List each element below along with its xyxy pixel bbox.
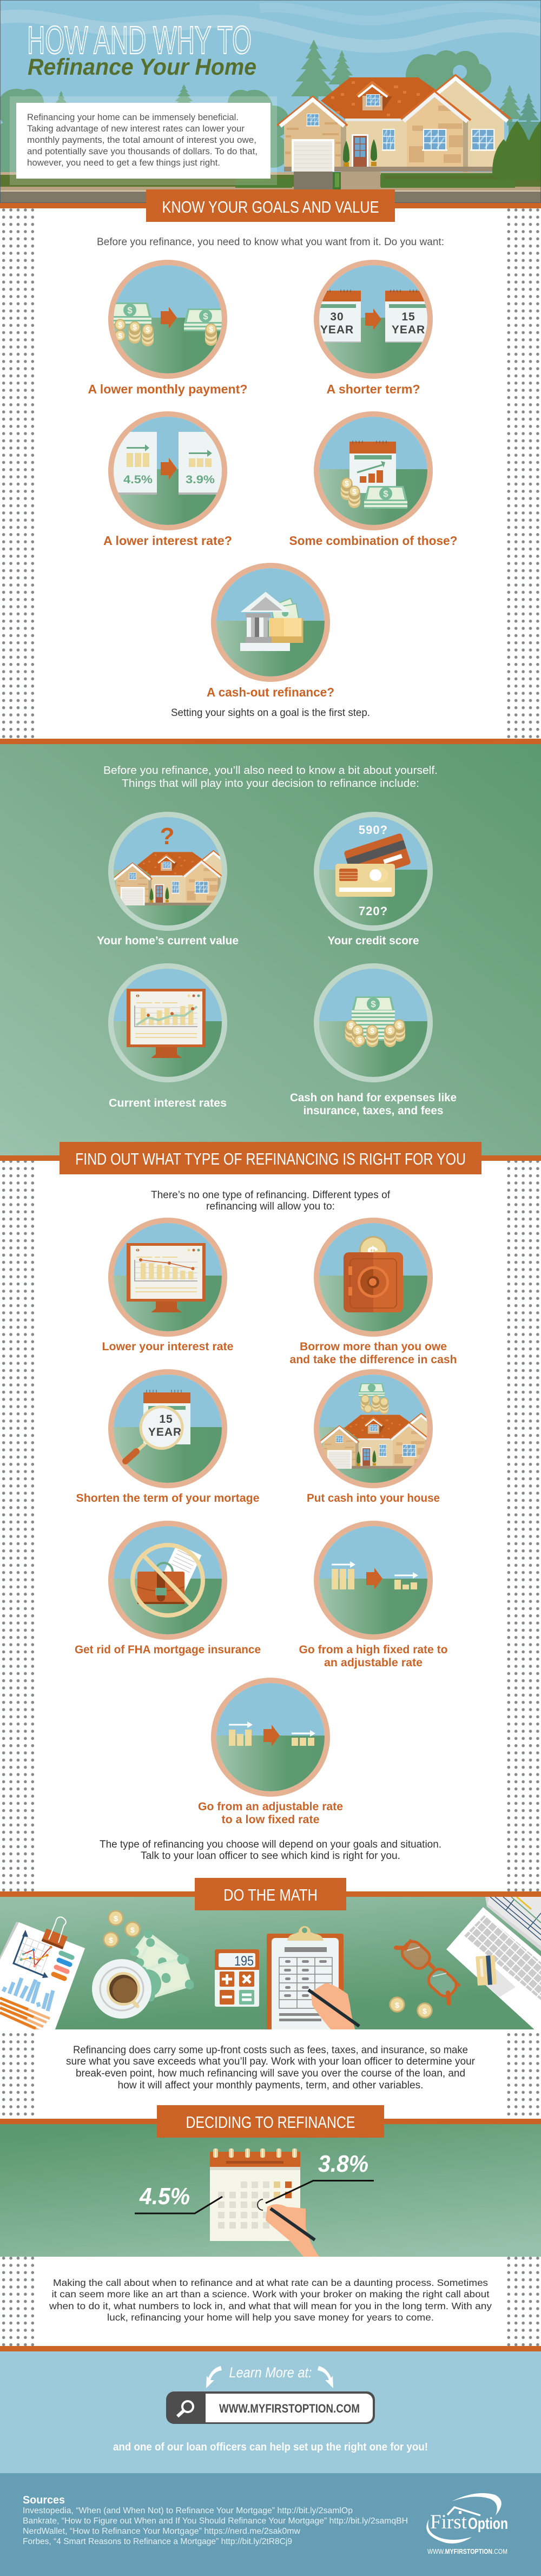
icon: lower interest rate: 3.9% [186, 474, 215, 486]
section intro: refinancing will allow you to: [206, 1201, 335, 1212]
label: Put cash into your house [307, 1492, 440, 1504]
intro text box: however, you need to get a few things just right. [27, 158, 220, 168]
label: Get rid of FHA mortgage insurance [75, 1644, 261, 1656]
label: Your credit score [328, 935, 419, 947]
icon: cash on hand: $ [371, 999, 376, 1009]
coffee cup and saucer [92, 1959, 151, 2019]
closing text: Talk to your loan officer to see which kind is right for you. [141, 1850, 400, 1862]
panel: deciding text [0, 2257, 541, 2346]
icon: shorter term: YEAR [320, 324, 354, 336]
logo [426, 2493, 508, 2555]
icon: credit score [316, 814, 430, 928]
sources list: Forbes, “4 Smart Reasons to Refinance a Mortgage” http://bit.ly/2tR8Cj9 [23, 2537, 292, 2546]
coins top: $ [130, 1926, 135, 1934]
label: Some combination of those? [289, 534, 458, 548]
logo: First [430, 2511, 467, 2533]
icon: lower monthly payment: $ [209, 325, 213, 333]
icon: cash on hand [316, 966, 430, 1080]
icon: lower monthly payment: $ [118, 331, 122, 340]
heading banner [157, 2105, 384, 2138]
label [299, 1644, 448, 1669]
icon: cash on hand: $ [355, 1026, 360, 1035]
section intro: Before you refinance, you need to know what you want from it. Do you want: [97, 236, 444, 248]
intro text box [16, 103, 270, 179]
background trees [0, 40, 541, 178]
calculator: 195 [234, 1954, 254, 1969]
label [198, 1800, 343, 1826]
panel: math text: Refinancing does carry some up-front costs such as fees, taxes, and insurance, so make [73, 2045, 468, 2056]
panel: learn more [0, 2346, 541, 2473]
icon: cash into house [316, 1372, 453, 1486]
label: A lower interest rate? [103, 534, 232, 548]
heading banner [60, 1142, 481, 1174]
label: Cash on hand for expenses like [290, 1092, 457, 1104]
icon: shorter term: YEAR [392, 324, 425, 336]
calendar [210, 2148, 300, 2241]
panel: know your goals [0, 189, 541, 739]
label: and take the difference in cash [290, 1353, 457, 1366]
label: Go from a high fixed rate to [299, 1644, 448, 1656]
panel: type of refinancing [0, 1142, 541, 1891]
panel: do the math [0, 1878, 541, 2036]
coins bottom: $ [423, 2007, 427, 2015]
icon: cash on hand: $ [358, 1036, 362, 1044]
intro text box: Refinancing your home can be immensely beneficial. [27, 113, 239, 122]
coins top [103, 1910, 141, 1948]
sources list: Investopedia, “When (and When Not) to Refinance Your Mortgage” http://bit.ly/2samlOp [23, 2506, 353, 2515]
heading banner: DO THE MATH [223, 1885, 318, 1904]
laptop [446, 1897, 541, 2035]
coins top: $ [114, 1914, 118, 1923]
section intro: Things that will play into your decision to refinance include: [122, 777, 419, 790]
title frame [10, 96, 277, 185]
panel: deciding text: when to do it, what numbers to lock in, and what that will mean for you in the long term. With any [49, 2301, 492, 2311]
coins bottom: $ [395, 2001, 399, 2009]
icon: some combination: $ [352, 487, 357, 496]
icon: home value: ? [160, 823, 174, 850]
callout line: 3.8% [266, 2181, 374, 2203]
call to action: and one of our loan officers can help set up the right one for you! [113, 2441, 428, 2453]
sources list: Bankrate, “How to Figure out When and If You Should Refinance Your Mortgage” http://bit.ly/2samqBH [23, 2516, 408, 2526]
intro text box: Taking advantage of new interest rates can lower your [27, 124, 245, 134]
section intro [103, 764, 438, 790]
heading banner [146, 189, 395, 222]
icon: safe and coin [316, 1220, 430, 1334]
icon: lower monthly payment: $ [203, 311, 208, 321]
callout line: 4.5% [135, 2197, 222, 2213]
label: Lower your interest rate [102, 1340, 234, 1353]
ground and road [0, 172, 541, 203]
panel: deciding text: it can seem more like an art than a science. Work with your broker on making the right call about [52, 2289, 490, 2299]
label: A lower monthly payment? [88, 382, 248, 396]
label: Borrow more than you owe [300, 1340, 447, 1353]
icon: cash on hand: $ [349, 1021, 353, 1030]
section intro: Before you refinance, you’ll also need to know a bit about yourself. [103, 764, 438, 777]
hand with pen [258, 2199, 319, 2257]
label: A shorter term? [327, 382, 420, 396]
panel: deciding text: luck, refinancing your home will help you save money for years to come. [107, 2312, 434, 2323]
icon: bank and wallet [214, 566, 327, 679]
icon: lower monthly payment: $ [133, 323, 137, 331]
label [290, 1340, 457, 1366]
logo: Option [468, 2515, 508, 2533]
panel: math text [0, 2029, 541, 2119]
panel: deciding text: Making the call about when to refinance and at what rate can be a daunting process. Sometimes [53, 2277, 488, 2288]
sources list [23, 2506, 408, 2546]
panel: math text: how it will affect your monthly payments, term, and other variables. [118, 2080, 423, 2091]
search bar [166, 2391, 375, 2424]
hand with pen [308, 1983, 359, 2030]
label: A cash-out refinance? [207, 685, 334, 699]
icon: some combination [316, 414, 430, 528]
icon: shorter term [314, 262, 433, 376]
closing text [100, 1839, 441, 1862]
sources heading: Sources [23, 2494, 65, 2506]
coins top: $ [109, 1936, 113, 1944]
label: Go from an adjustable rate [198, 1800, 343, 1813]
title line 1: HOW AND WHY TO [27, 19, 252, 62]
panel: math text: break-even point, how much refinancing will save you over the course of the loan, and [76, 2068, 465, 2079]
calendar under magnifier: 15 [159, 1413, 173, 1425]
glasses [396, 1938, 460, 2003]
label: Your home’s current value [97, 935, 239, 947]
rate 4.5%: 4.5% [139, 2183, 190, 2210]
icon: current interest rates monitor [111, 966, 225, 1080]
label: Current interest rates [109, 1097, 227, 1109]
section intro: There’s no one type of refinancing. Different types of [151, 1190, 391, 1201]
heading banner: DECIDING TO REFINANCE [186, 2113, 355, 2132]
calculator [215, 1949, 259, 2007]
icon: lower interest rate: 4.5% [123, 474, 153, 486]
label: insurance, taxes, and fees [303, 1105, 444, 1117]
sources list: NerdWallet, “How to Refinance Your Mortgage” https://nerd.me/2sak0mw [23, 2527, 301, 2536]
calendar under magnifier [126, 1390, 190, 1461]
panel: sources footer [0, 2473, 541, 2576]
coins bottom [389, 1996, 433, 2019]
panel: hero header [0, 0, 541, 203]
icon: cash on hand: $ [370, 1026, 374, 1035]
evergreen shrubs [492, 121, 541, 180]
icon: lower interest rate [111, 414, 225, 528]
title line 2: Refinance Your Home [28, 54, 256, 80]
clipboard [267, 1926, 344, 2036]
heading banner: KNOW YOUR GOALS AND VALUE [162, 198, 379, 216]
panel: deciding to refinance [0, 2105, 541, 2257]
icon: safe and coin: $ [367, 1243, 379, 1266]
heading banner [195, 1878, 346, 1910]
icon: adjustable to fixed [214, 1680, 327, 1794]
closing text: Setting your sights on a goal is the first step. [171, 707, 370, 719]
rate 3.8%: 3.8% [318, 2151, 368, 2177]
label [290, 1092, 457, 1117]
search bar: WWW.MYFIRSTOPTION.COM [219, 2402, 360, 2415]
icon: lower monthly payment [108, 262, 227, 376]
paper with charts [0, 1917, 85, 2032]
panel: know yourself [0, 739, 541, 1155]
icon: cash on hand: $ [397, 1021, 401, 1029]
icon: lower monthly payment: $ [146, 325, 150, 334]
icon: some combination: $ [383, 489, 388, 499]
closing text: The type of refinancing you choose will depend on your goals and situation. [100, 1839, 441, 1850]
icon: fixed to adjustable [316, 1523, 430, 1637]
intro text box: and potentially save you thousands of dollars. To do that, [27, 147, 258, 156]
panel: math text: sure what you save exceeds what you’ll pay. Work with your loan officer to determine your [66, 2056, 476, 2067]
intro text box: monthly payments, the total amount of interest you owe, [27, 135, 256, 145]
label: an adjustable rate [324, 1657, 423, 1669]
icon: some combination: $ [345, 479, 349, 488]
label: Shorten the term of your mortage [76, 1492, 260, 1504]
calendar under magnifier: YEAR [148, 1426, 182, 1438]
icon: shorter term: 15 [401, 311, 415, 323]
icon: home value [111, 814, 245, 928]
icon: falling rate monitor [111, 1220, 225, 1334]
icon: shorter term: 30 [330, 311, 344, 323]
icon: lower monthly payment: $ [118, 320, 122, 329]
learn more text: Learn More at: [229, 2364, 312, 2381]
icon: no FHA insurance [111, 1523, 225, 1637]
fanned bills [128, 1928, 195, 2002]
section intro [151, 1190, 391, 1212]
icon: credit score: 590? [359, 823, 388, 837]
icon: magnified 15 year calendar [111, 1372, 225, 1486]
arrow left [206, 2366, 222, 2388]
house [277, 75, 511, 172]
icon: credit score: 720? [359, 904, 388, 918]
label: to a low fixed rate [222, 1813, 319, 1826]
arrow right [318, 2366, 333, 2388]
logo: WWW.MYFIRSTOPTION.COM [427, 2548, 507, 2555]
icon: lower monthly payment: $ [127, 305, 133, 316]
icon: cash on hand: $ [388, 1026, 392, 1035]
